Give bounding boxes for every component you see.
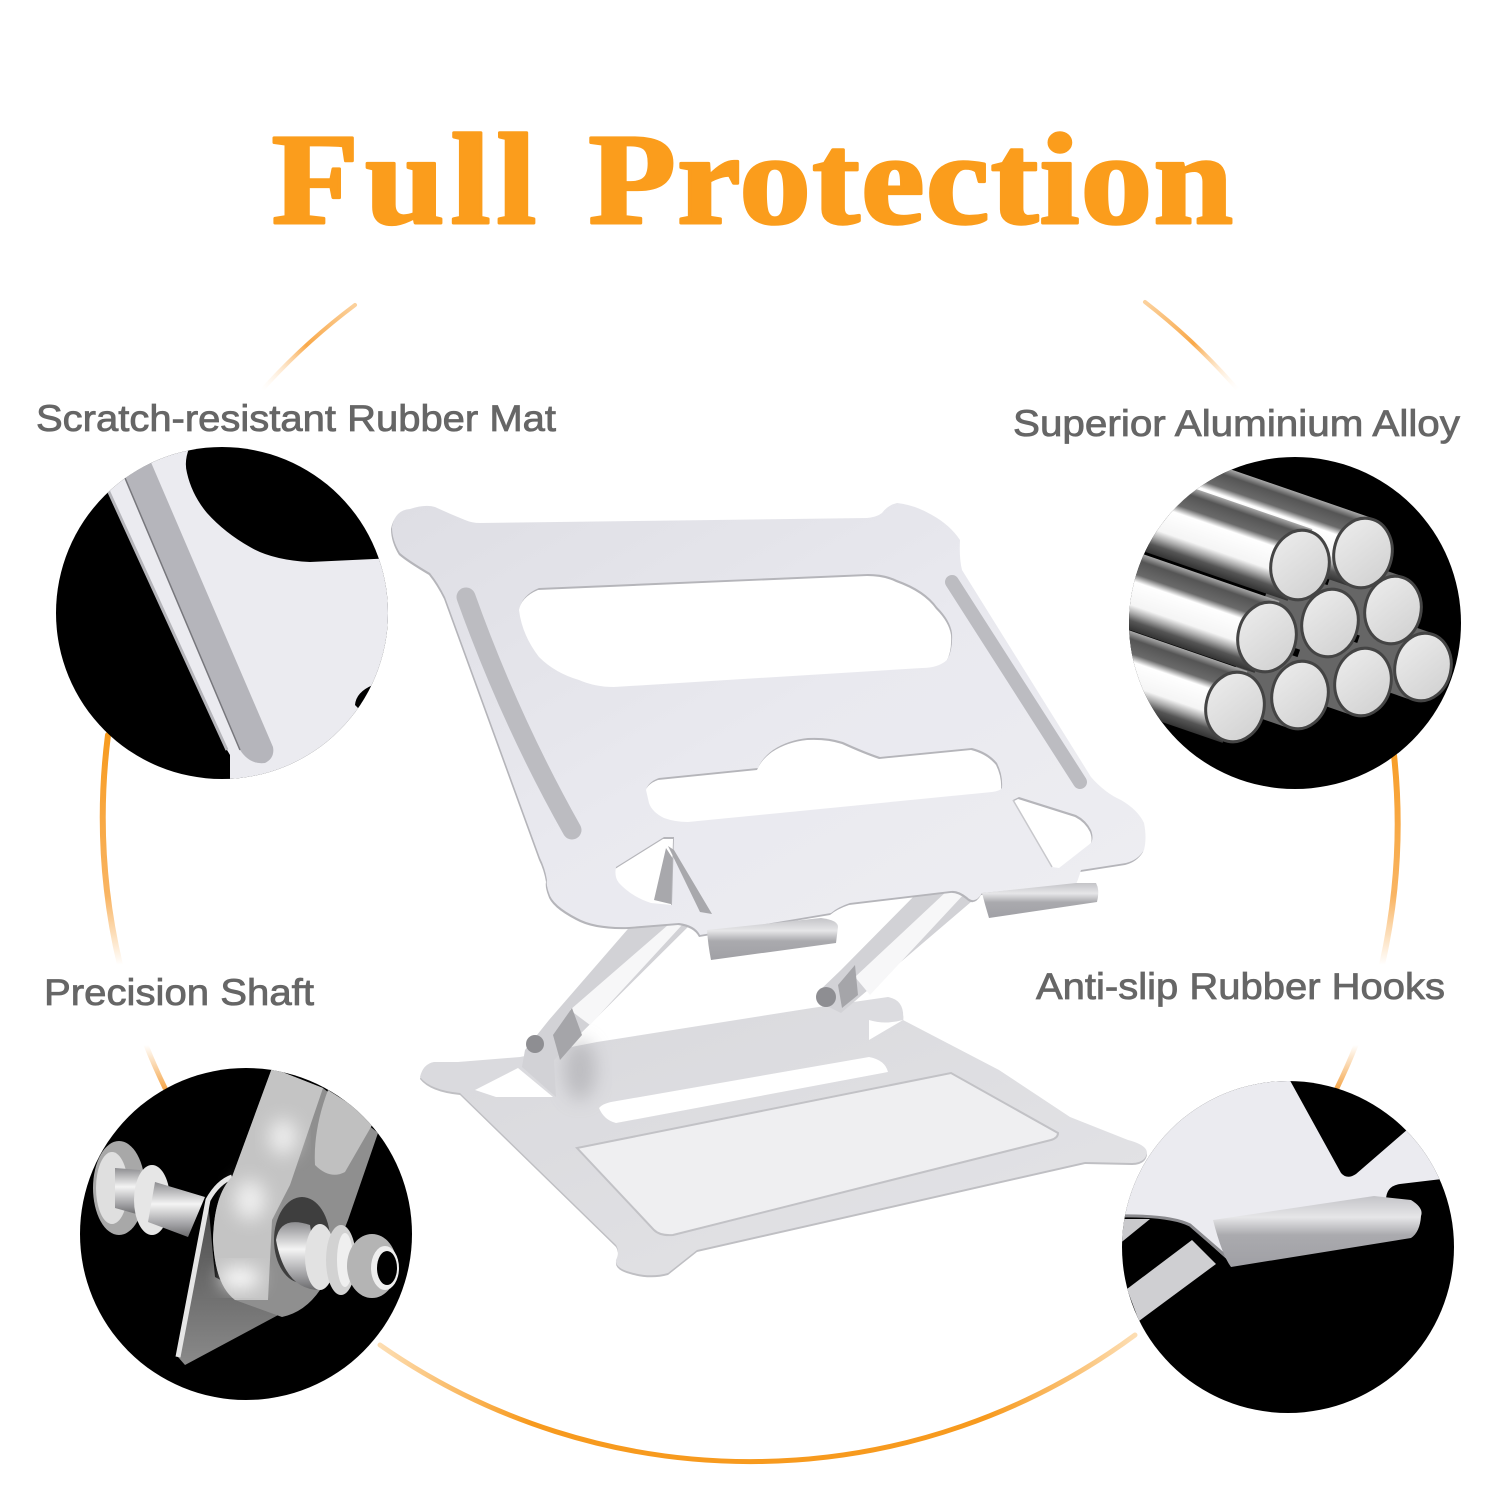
detail circle: rubber mat — [50, 440, 395, 790]
bracket edge — [668, 846, 712, 914]
nut and pin — [274, 1197, 399, 1298]
label: rubber hooks: Anti-slip Rubber Hooks — [1036, 965, 1445, 1007]
rods — [1129, 470, 1430, 743]
title: Full — [272, 107, 542, 252]
top plate — [391, 503, 1146, 937]
base plate — [420, 997, 1147, 1277]
label: rubber mat: Scratch-resistant Rubber Mat — [36, 397, 557, 439]
title: Protection — [589, 107, 1234, 252]
orange ring arcs — [103, 302, 1398, 1462]
rear bracket — [654, 848, 708, 913]
laptop stand — [391, 503, 1147, 1277]
detail circle: aluminium rods — [1129, 457, 1461, 789]
rubber strips — [466, 582, 1080, 830]
detail circle: precision shaft — [75, 1062, 420, 1407]
label: precision shaft: Precision Shaft — [44, 971, 315, 1013]
detail circle: rubber hook — [1118, 1075, 1463, 1420]
loose rivet — [93, 1141, 205, 1237]
folding arms — [522, 885, 985, 1097]
rod ends — [1199, 513, 1457, 747]
arm and bracket — [178, 1068, 378, 1365]
hooks — [707, 883, 1098, 960]
label: aluminium alloy: Superior Aluminium Alloy — [1013, 402, 1460, 444]
